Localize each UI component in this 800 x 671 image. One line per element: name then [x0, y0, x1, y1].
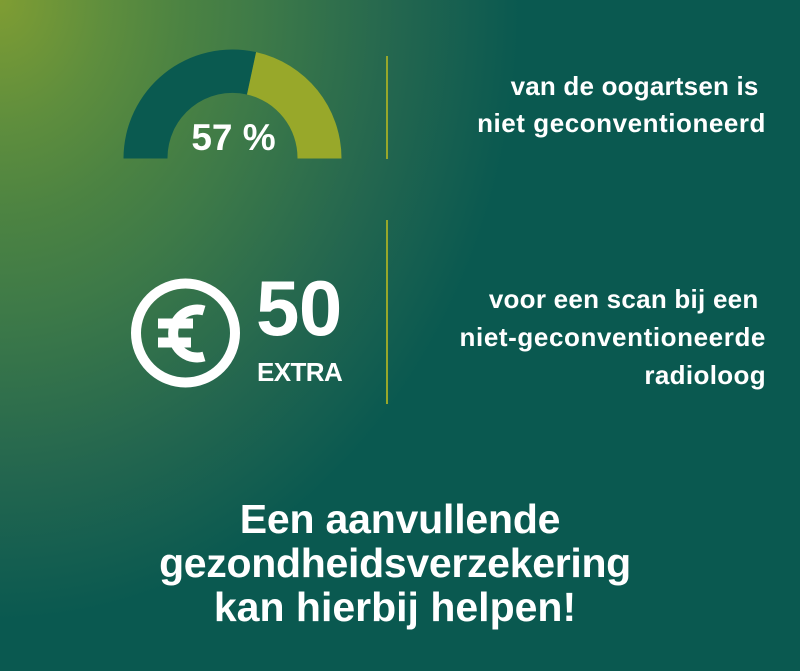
text: radioloog — [460, 284, 766, 390]
text: radioloog: radioloog — [644, 360, 766, 390]
gauge value: 57 % — [191, 117, 276, 158]
label: extra: EXTRA — [257, 357, 342, 387]
divider: top — [386, 56, 388, 159]
closing heading: kan hierbij helpen! — [214, 584, 576, 630]
gauge chart: 57 % — [124, 50, 342, 158]
text: oogartsen: niet geconventioneerd — [477, 108, 766, 138]
text: oogartsen: van de oogartsen is — [511, 71, 759, 101]
closing heading: gezondheidsverzekering — [159, 540, 631, 586]
number: 50: 50 — [256, 264, 342, 352]
icon: euro coin — [131, 278, 240, 388]
gauge segment: dark — [124, 50, 256, 158]
closing heading — [159, 496, 631, 630]
text: radioloog: voor een scan bij een — [489, 284, 759, 314]
text: radioloog: niet-geconventioneerde — [460, 322, 766, 352]
closing heading: Een aanvullende — [240, 496, 560, 542]
gauge segment: olive — [247, 52, 342, 158]
text: oogartsen — [477, 71, 766, 138]
figure: 50 extra — [256, 264, 342, 387]
divider: middle — [386, 220, 388, 404]
